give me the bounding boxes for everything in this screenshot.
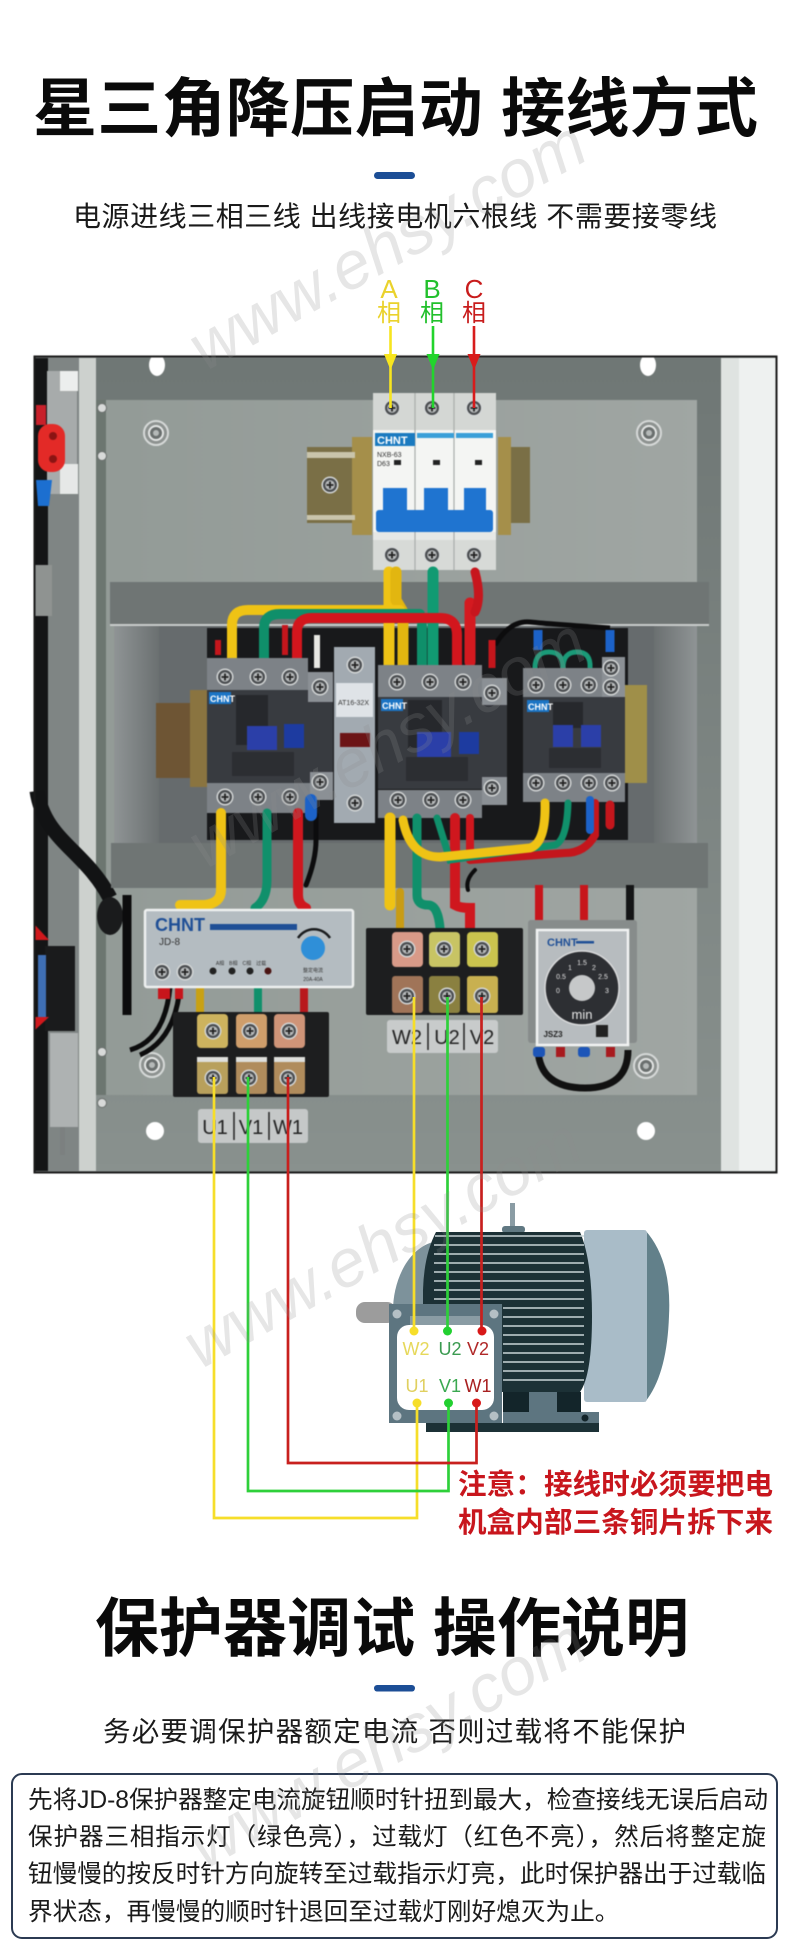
- phase label A: [377, 274, 401, 327]
- label plate U1 V1 W1: W1: [273, 1117, 303, 1139]
- contactor 2: [378, 665, 507, 818]
- motor fan cover: [584, 1230, 669, 1402]
- motor terminal labels: W2: [402, 1339, 430, 1359]
- motor finned body: [423, 1232, 592, 1392]
- wire: W2 terminal to motor: [413, 997, 415, 1331]
- time relay JSZ3: [528, 885, 637, 1088]
- arrow: phase C into breaker: [468, 326, 480, 408]
- phase label B: 相: [420, 300, 444, 327]
- phase label C: C: [465, 274, 483, 304]
- phase label A: A: [380, 274, 398, 304]
- time relay JSZ3: 0.5: [556, 974, 566, 981]
- motor terminal box: [389, 1304, 502, 1423]
- watermark: [171, 105, 599, 1883]
- circuit breaker: CHNT: [377, 435, 408, 447]
- circuit breaker: [373, 393, 496, 570]
- motor feet and base: [426, 1392, 599, 1432]
- watermark: www.ehsy.com: [171, 1103, 594, 1383]
- contactor 3: [523, 652, 625, 802]
- motor terminal labels: [402, 1339, 492, 1396]
- phase label C: [462, 274, 486, 327]
- motor terminal labels: V1: [439, 1376, 461, 1396]
- label plate W2 U2 V2: [387, 1020, 498, 1053]
- panel: control cabinet photo: [34, 354, 777, 1173]
- terminal block right W2 U2 V2: [366, 928, 523, 1015]
- heading accent dash: [374, 172, 415, 179]
- JD-8 motor protector: CHNT: [155, 915, 205, 935]
- wire: V1 terminal to motor: [248, 1077, 448, 1491]
- motor terminal labels: U1: [405, 1376, 429, 1396]
- subtitle: 务必要调保护器额定电流 否则过载将不能保护: [103, 1716, 686, 1747]
- timer relay module: [334, 647, 375, 823]
- callout: wiring warning: [458, 1462, 773, 1541]
- din rail top: [307, 437, 530, 535]
- contactor 3: CHNT: [528, 702, 553, 712]
- cabinet door right edge: [721, 358, 776, 1171]
- contactor 2: CHNT: [382, 701, 407, 711]
- lower cross bar: [111, 843, 708, 888]
- wires: breaker to contactors: [232, 572, 478, 665]
- black control wires and lugs: [218, 622, 610, 668]
- wire: W1 terminal to motor: [288, 1077, 476, 1463]
- time relay JSZ3: 1.5: [577, 960, 587, 967]
- circuit breaker: NXB-63: [377, 452, 402, 459]
- JD-8 motor protector: JD-8: [159, 937, 181, 948]
- left support bar: [114, 625, 159, 843]
- time relay JSZ3: 1: [568, 965, 572, 972]
- instruction text: 钮慢慢的按反时针方向旋转至过载指示灯亮，此时保护器出于过载临: [28, 1860, 766, 1888]
- motor illustration: [356, 1203, 669, 1432]
- phase label C: 相: [462, 300, 486, 327]
- motor front housing: [393, 1242, 433, 1330]
- time relay JSZ3: JSZ3: [543, 1030, 563, 1039]
- watermark: www.ehsy.com: [176, 105, 599, 385]
- label plate W2 U2 V2: U2: [434, 1027, 460, 1049]
- JD-8 motor protector: 整定电流: [303, 967, 323, 974]
- terminal block left U1 V1 W1: [173, 1012, 329, 1097]
- arrow: phase A into breaker: [384, 326, 397, 408]
- phase label A: 相: [377, 300, 401, 327]
- callout: wiring warning: 机盒内部三条铜片拆下来: [458, 1500, 773, 1541]
- JD-8 motor protector: A相 B相 C相 过载: [216, 960, 266, 967]
- instruction text: 保护器三相指示灯（绿色亮），过载灯（红色不亮），然后将整定旋: [28, 1823, 766, 1851]
- time relay JSZ3: CHNT: [547, 937, 578, 949]
- heading accent dash: [374, 1685, 415, 1692]
- JD-8 motor protector: [145, 910, 353, 987]
- dark recess behind contactors: [159, 625, 654, 843]
- cabinet interior: [96, 358, 722, 1171]
- motor terminal labels: U2: [438, 1339, 462, 1359]
- label plate W2 U2 V2: W2: [392, 1027, 422, 1049]
- spiral cable wrap: [37, 791, 123, 935]
- contactor 1: [207, 658, 333, 813]
- panel: operating instructions: [12, 1774, 777, 1938]
- phase label B: B: [423, 274, 441, 304]
- door white frame: [79, 358, 96, 1171]
- label plate U1 V1 W1: V1: [239, 1117, 263, 1139]
- time relay JSZ3: min: [572, 1007, 592, 1022]
- plate edge nuts: [98, 404, 106, 1108]
- time relay JSZ3: 2.5: [598, 974, 608, 981]
- motor terminal labels: V2: [467, 1339, 489, 1359]
- time relay JSZ3: 2: [592, 965, 596, 972]
- time relay JSZ3: 0: [556, 988, 560, 995]
- phase label B: [420, 274, 444, 327]
- motor terminal labels: W1: [464, 1376, 492, 1396]
- right support bar: [654, 625, 697, 843]
- motor terminal dots: [410, 1326, 486, 1408]
- subtitle: 电源进线三相三线 出线接电机六根线 不需要接零线: [73, 201, 717, 232]
- arrow: phase B into breaker: [426, 326, 440, 408]
- label plate U1 V1 W1: U1: [202, 1117, 228, 1139]
- watermark: www.ehsy.com: [176, 1603, 599, 1883]
- protector wiring to terminal block: [127, 895, 304, 1055]
- plate bolts: [140, 421, 661, 1078]
- top mounting holes: [149, 354, 656, 376]
- din rail contactors: [156, 685, 647, 787]
- red cable gland: [38, 424, 65, 472]
- label plate W2 U2 V2: V2: [470, 1027, 494, 1049]
- bottom mounting holes: [146, 1122, 655, 1140]
- plate side channel: [96, 400, 106, 1095]
- label plate U1 V1 W1: [198, 1109, 308, 1143]
- title: protector adjustment: 保护器调试 操作说明: [95, 1593, 689, 1665]
- instruction text: [28, 1786, 768, 1926]
- motor lifting eye: [502, 1203, 525, 1233]
- title: wiring method: 星三角降压启动 接线方式: [33, 73, 758, 145]
- timer relay module: AT16-32X: [338, 700, 369, 707]
- wire: U1 terminal to motor: [214, 1077, 417, 1518]
- upper cross bar: [110, 582, 709, 626]
- time relay JSZ3: 3: [605, 988, 609, 995]
- JD-8 motor protector: 20A-40A: [303, 977, 323, 983]
- circuit breaker: D63: [377, 461, 390, 468]
- wire: U2 terminal to motor: [446, 997, 449, 1331]
- watermark: www.ehsy.com: [176, 603, 599, 883]
- left door strip: [35, 358, 80, 1171]
- wire: V2 terminal to motor: [480, 997, 483, 1331]
- callout: wiring warning: 注意：接线时必须要把电: [458, 1462, 773, 1503]
- motor shaft: [356, 1302, 396, 1323]
- contactor 1: CHNT: [210, 694, 235, 704]
- instruction text: 先将JD-8保护器整定电流旋钮顺时针扭到最大，检查接线无误后启动: [28, 1786, 768, 1814]
- instruction text: 界状态，再慢慢的顺时针退回至过载灯刚好熄灭为止。: [28, 1898, 619, 1926]
- panel outline: [34, 356, 776, 1172]
- mounting plate: [106, 400, 697, 1095]
- wires: contactor outputs: [180, 800, 610, 928]
